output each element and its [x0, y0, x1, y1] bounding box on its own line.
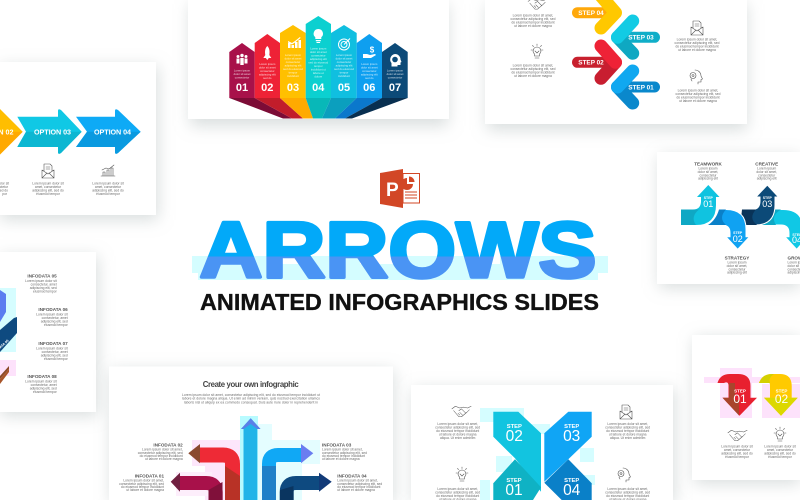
column 01: Lorem ipsum	[234, 68, 251, 72]
arrow: option 04: OPTION 04	[94, 127, 131, 136]
text: upper right block: ut labore et dolore magna	[609, 432, 647, 436]
icon: bulb	[774, 427, 786, 441]
column 02: dolor sit amet	[259, 66, 276, 70]
text: infodata 04: ut labore et dolore magna	[337, 488, 375, 492]
text: creative: Lorem ipsum	[757, 166, 776, 170]
text: infodata 02: consectetur adipiscing elit, sed	[138, 451, 183, 455]
panel: infodata list	[0, 252, 98, 416]
text: infodata 07: adipiscing elit, sed	[41, 354, 68, 358]
text: lower right block	[605, 487, 650, 500]
text: option 04 description: adipiscing elit, sed do	[92, 188, 124, 192]
column 05	[331, 25, 357, 98]
arrow: step 01	[718, 374, 757, 416]
column 04: incididunt ut	[311, 68, 326, 72]
text: infodata 05	[25, 274, 58, 294]
text: upper left block: Lorem ipsum dolor sit amet,	[437, 422, 478, 426]
text: creative	[755, 162, 778, 180]
text: infodata 01	[119, 474, 164, 492]
arrow: infodata 02	[188, 444, 240, 500]
shape: step 03: STEP	[564, 424, 579, 430]
column 04: tempor	[314, 64, 323, 68]
text: creative: adipiscing elit	[757, 176, 777, 180]
text: infodata 03: INFODATA 03	[322, 442, 352, 448]
arrow: step 01: 01	[703, 199, 713, 209]
text: infodata 04: Lorem ipsum dolor sit amet,	[337, 478, 378, 482]
text: infodata 03	[322, 442, 367, 461]
text: upper left block: consectetur adipiscing elit, sed	[435, 426, 480, 430]
text: strategy: adipiscing elit	[727, 270, 747, 274]
column 04: dolore	[314, 74, 323, 78]
text: teamwork: Lorem ipsum	[698, 166, 718, 170]
column 05: tempor	[340, 70, 348, 74]
text: lower left block: consectetur adipiscing elit, sed	[511, 67, 556, 71]
text: infodata 02	[138, 442, 183, 461]
icon: handshake	[528, 0, 547, 9]
arrow: step 01	[618, 71, 654, 103]
column 07	[382, 43, 408, 98]
arrow: step 04: STEP 04	[578, 10, 604, 17]
arrow: step 03	[618, 21, 654, 53]
shape: step 02: STEP	[507, 424, 522, 430]
text: step 02 description: Lorem ipsum dolor sit	[764, 444, 796, 448]
text: upper left block	[435, 422, 480, 440]
icon: bar chart	[288, 37, 301, 48]
column 01: 01	[236, 82, 248, 94]
shape: step 01: 01	[505, 482, 523, 499]
arrow: infodata 01	[171, 473, 222, 500]
column 07: consectetur	[388, 76, 402, 80]
text: upper left block: do eiusmod tempor incididunt	[436, 429, 479, 433]
icon: handshake	[728, 430, 747, 441]
arrow: infodata 04	[280, 473, 332, 500]
text: top left block	[511, 14, 556, 28]
column 01: dolor sit amet	[234, 72, 251, 76]
arrow: step 01: STEP 01	[628, 84, 654, 91]
column 04: dolor sit amet	[310, 50, 327, 54]
column 01	[229, 43, 255, 98]
column 02: 02	[261, 82, 273, 94]
text: lower left block: consectetur adipiscing elit, sed	[435, 490, 480, 494]
arrow: step 02: STEP 02	[578, 60, 604, 67]
text: infodata 08	[25, 374, 58, 394]
text: step 01 description: amet, consectetur	[724, 448, 751, 452]
panel: seven column arrows	[188, 0, 449, 126]
text: lower left block: do eiusmod tempor incididunt	[436, 494, 479, 498]
text: top right block: Lorem ipsum dolor sit amet,	[677, 38, 717, 42]
text: option 02 description	[0, 182, 9, 196]
icon: bulb	[456, 467, 468, 481]
text: lower right block	[676, 88, 721, 103]
column 05: incididunt	[338, 74, 350, 78]
text: option 03 description	[32, 182, 64, 196]
text: upper right block: consectetur adipiscing elit, sed	[605, 426, 650, 430]
shape: step 04	[544, 459, 592, 500]
text: strategy: Lorem ipsum	[727, 260, 747, 264]
text: creative: consectetur	[758, 174, 776, 178]
text: upper right block: Lorem ipsum dolor sit amet,	[607, 422, 648, 426]
text: option 04 description: amet, consectetur	[95, 185, 122, 189]
text: lower left block	[435, 487, 480, 500]
column 03: incididunt	[287, 74, 299, 78]
text: step 02 description: adipiscing elit, sed do	[764, 452, 796, 456]
column 04: sed do eiusmod	[308, 60, 329, 64]
arrow: infodata 03	[262, 444, 313, 500]
column 06: dolor sit amet	[361, 66, 378, 70]
icon: envelope	[691, 21, 703, 35]
text: option 03 description: adipiscing elit, sed do	[32, 188, 64, 192]
icon: head with gear	[690, 70, 702, 84]
text: infodata 06: Lorem ipsum dolor sit	[36, 312, 68, 316]
icon: people	[236, 54, 248, 65]
icon: envelope	[620, 405, 632, 419]
text: infodata 03: ut labore et dolore magna	[322, 457, 360, 461]
column 03: Lorem ipsum	[285, 53, 302, 57]
intro text: laboris nisi ut aliquip ex ea commodo consequat. Duis aute irure dolor in reprehenderit in	[184, 400, 318, 404]
shape: step 01: STEP	[506, 478, 522, 484]
text: infodata 08: INFODATA 08	[27, 374, 57, 379]
panel: step chevrons	[485, 0, 747, 130]
panel: option arrows	[0, 62, 158, 220]
text: upper right block: do eiusmod tempor incididunt	[606, 429, 649, 433]
column 06	[357, 34, 382, 98]
column 04: Lorem ipsum	[310, 46, 327, 50]
text: infodata 07: Lorem ipsum dolor sit	[36, 346, 68, 350]
icon: hand with dollar: $	[370, 46, 375, 54]
text: step 02 description: amet, consectetur	[767, 448, 794, 452]
text: top right block: ut labore et dolore magna	[678, 48, 716, 52]
text: upper left block: aliqua. Ut enim adminim	[440, 436, 476, 440]
icon: powerpoint logo: P	[386, 180, 399, 201]
icon: light bulb	[314, 29, 323, 43]
text: infodata 05: consectetur, amet	[31, 282, 57, 286]
arrow: step 02	[759, 374, 798, 416]
column 03: dolor sit amet	[285, 56, 302, 60]
text: upper right block	[605, 422, 650, 440]
text: top right block: do eiusmod tempor incididunt	[675, 44, 719, 48]
arrow: step 02: STEP	[733, 231, 743, 235]
column 05: dolor sit amet	[336, 56, 353, 60]
column 06: consectetur	[362, 69, 377, 73]
column 03: 03	[287, 82, 299, 94]
column 05: 05	[338, 82, 350, 94]
arrow: step 02	[578, 46, 616, 78]
text: infodata 04: consectetur adipiscing elit, sed	[337, 482, 382, 486]
text: infodata 01: INFODATA 01	[135, 474, 164, 478]
icon: envelope	[42, 164, 54, 178]
column 05: consectetur	[337, 60, 351, 64]
text: infodata 02: Lorem ipsum dolor sit amet,	[142, 448, 183, 452]
column 05: Lorem ipsum	[336, 53, 353, 57]
intro text: labore et dolore magna aliqua. Ut enim ad minim veniam, quis nostrud exercitation ullamco	[182, 397, 320, 401]
text: upper right block: aliqua. Ut enim adminim	[610, 436, 646, 440]
text: infodata 08: adipiscing elit, sed	[30, 386, 57, 390]
arrow: step 04	[578, 0, 616, 28]
arrow: option 03	[17, 109, 82, 154]
text: infodata 07: INFODATA 07	[38, 341, 68, 346]
text: lower right block: do eiusmod tempor incididunt	[606, 494, 649, 498]
icon: bulb	[531, 44, 543, 58]
text: strategy: dolor sit amet,	[727, 264, 747, 268]
text: lower right block: consectetur adipiscing elit, sed	[676, 92, 721, 96]
text: strategy: consectetur	[728, 268, 746, 272]
arrow: center up	[241, 418, 260, 500]
column 02: sed do	[263, 76, 272, 80]
arrow fragments	[0, 290, 17, 384]
text: lower left block: Lorem ipsum dolor sit amet,	[437, 487, 478, 491]
column 04: adipiscing elit	[310, 57, 327, 61]
text: infodata 01: do eiusmod tempor incididunt	[121, 485, 164, 489]
column 04	[306, 16, 331, 98]
text: infodata 01: consectetur adipiscing elit, sed	[119, 482, 164, 486]
shape: step 01	[493, 459, 541, 500]
text: lower left block: ut labore et dolore magna	[514, 74, 552, 78]
text: infodata 06: adipiscing elit, sed	[41, 320, 68, 324]
shape: step 02	[493, 412, 541, 492]
text: step 02 description	[764, 444, 796, 459]
text: infodata 02: ut labore et dolore magna	[145, 457, 183, 461]
shape: step 04: STEP	[564, 478, 579, 484]
icon: handshake	[452, 406, 471, 417]
text: option 03 description: Lorem ipsum dolor sit	[32, 182, 64, 186]
text: infodata 08: eiusmod tempor	[33, 390, 58, 394]
column 06: Lorem ipsum	[361, 62, 378, 66]
text: infodata 05: eiusmod tempor	[33, 290, 58, 294]
column 01: consectetur	[235, 76, 249, 80]
text: infodata 01: Lorem ipsum dolor sit amet,	[123, 478, 164, 482]
text: teamwork: consectetur	[699, 174, 717, 178]
title: arrows: ARROWS	[200, 205, 596, 294]
text: step 02 description: eiusmod tempor	[768, 455, 793, 459]
text: infodata 02: INFODATA 02	[153, 442, 183, 448]
text: infodata 08: Lorem ipsum dolor sit	[25, 380, 57, 384]
text: infodata 04: INFODATA 04	[337, 474, 367, 478]
column 04: consectetur	[311, 54, 326, 58]
text: creative: CREATIVE	[755, 162, 778, 166]
text: step 01 description: eiusmod tempor	[725, 455, 750, 459]
pixelated colour artefacts	[704, 368, 800, 418]
column 02: Lorem ipsum	[259, 62, 276, 66]
arrow: step 03: STEP	[763, 196, 773, 200]
text: teamwork: dolor sit amet,	[698, 170, 718, 174]
text: lower right block: ut labore et dolore magna	[679, 99, 717, 103]
column 02: consectetur	[260, 69, 275, 73]
text: lower right block: Lorem ipsum dolor sit amet,	[607, 487, 648, 491]
text: infodata 07: consectetur, amet	[42, 350, 68, 354]
text: creative: dolor sit amet,	[756, 170, 777, 174]
text: step 01 description: Lorem ipsum dolor sit	[721, 444, 753, 448]
text: infodata 06: INFODATA 06	[38, 307, 68, 312]
panel: create your own infographic	[109, 366, 394, 500]
text: infodata 04: do eiusmod tempor incididunt	[337, 485, 380, 489]
text: option 04 description: Lorem ipsum dolor sit	[92, 182, 124, 186]
text: top right block	[675, 38, 720, 52]
column 04: 04	[312, 82, 325, 94]
column 03: sed do eiusmod	[283, 67, 303, 71]
column 07: Lorem ipsum	[387, 68, 404, 72]
text: top left block: do eiusmod tempor incididunt	[511, 20, 555, 24]
text: option 02 description: por	[2, 192, 8, 196]
icon: chart	[101, 165, 115, 176]
panel: down arrows	[692, 335, 800, 484]
text: teamwork: TEAMWORK	[694, 162, 722, 166]
text: teamwork: adipiscing elit	[698, 176, 718, 180]
text: lower left block	[511, 64, 556, 78]
text: infodata 03: consectetur adipiscing elit, sed	[322, 451, 367, 455]
text: top left block: Lorem ipsum dolor sit amet,	[513, 14, 553, 18]
column 05: adipiscing elit	[336, 64, 353, 68]
arrow: step 03: STEP 03	[628, 35, 654, 42]
column 06: adipiscing elit	[361, 72, 378, 76]
title: Create your own infographic	[203, 380, 299, 389]
fan folds under columns	[229, 98, 408, 118]
text: infodata 05: Lorem ipsum dolor sit	[25, 279, 57, 283]
column 03	[280, 25, 306, 98]
text: lower right block: consectetur adipiscing elit, sed	[605, 490, 650, 494]
text: infodata 02: do eiusmod tempor incididunt	[140, 454, 183, 458]
icon: target	[338, 38, 350, 50]
arrow: step 02: 02	[733, 234, 743, 244]
arrow: option 03: OPTION 03	[34, 127, 71, 136]
column 07: 07	[389, 82, 401, 94]
text: growth	[788, 256, 800, 274]
text: option 04 description: eiusmod tempor	[96, 192, 121, 196]
icon: head with gear	[618, 468, 630, 482]
icon: rocket	[263, 46, 271, 60]
column 07: dolor sit amet	[387, 72, 404, 76]
arrow: step 01	[681, 185, 720, 225]
text: infodata 06: eiusmod tempor	[44, 323, 69, 327]
intro text: Lorem ipsum dolor sit amet, consectetur adipiscing elit, sed do eiusmod tempor incididunt ut	[182, 393, 320, 397]
text: step 01 description: adipiscing elit, sed do	[721, 452, 753, 456]
text: infodata 07: eiusmod tempor	[44, 357, 69, 361]
arrow: step 03: 03	[762, 199, 772, 209]
text: teamwork	[694, 162, 722, 180]
text: option 03 description: eiusmod tempor	[36, 192, 61, 196]
text: infodata 06	[36, 307, 69, 327]
text: infodata 07	[36, 341, 69, 361]
text: strategy: STRATEGY	[725, 256, 749, 260]
arrow: option 02	[0, 109, 23, 154]
text: strategy	[725, 256, 749, 274]
icon: powerpoint logo	[380, 169, 420, 208]
column 03: adipiscing elit	[285, 64, 302, 68]
column 04: labore et	[313, 71, 324, 75]
column 02: adipiscing elit	[259, 72, 276, 76]
text: top left block: consectetur adipiscing elit, sed	[511, 17, 556, 21]
text: top right block: consectetur adipiscing elit, sed	[675, 41, 720, 45]
column 06: sed do	[365, 76, 374, 80]
shape: step 03: 03	[563, 428, 580, 445]
shape: step 03	[544, 412, 592, 482]
panel: curved step arrows	[657, 152, 800, 288]
text: infodata 01: ut labore et dolore magna	[126, 488, 164, 492]
intro text	[182, 393, 320, 404]
shape: step 02: 02	[506, 428, 523, 445]
pixelated colour artefacts	[176, 416, 320, 500]
text: lower left block: Lorem ipsum dolor sit amet,	[513, 64, 553, 68]
arrow: step 02	[708, 210, 750, 249]
text: infodata 05: INFODATA 05	[27, 274, 57, 278]
arrow: step 02: 02	[775, 392, 788, 406]
text: infodata 03: Lorem ipsum dolor sit amet,	[322, 448, 363, 452]
text: infodata 06: consectetur, amet	[42, 316, 68, 320]
pixelated colour artefacts	[480, 408, 595, 500]
panel: x shaped steps	[411, 385, 675, 500]
arrow: step 01: STEP	[734, 388, 746, 394]
arrow: step 04	[762, 210, 800, 249]
text: infodata 03: do eiusmod tempor incididunt	[322, 454, 365, 458]
text: infodata 04	[337, 474, 382, 492]
shape: step 04: 04	[563, 482, 581, 499]
icon: head with globe	[390, 54, 402, 66]
arrow: step 01: STEP	[704, 196, 714, 200]
subtitle: ANIMATED INFOGRAPHICS SLIDES	[200, 289, 599, 315]
arrow: step 01: 01	[733, 392, 747, 406]
text: lower right block: do eiusmod tempor incididunt	[676, 96, 720, 100]
text: upper left block: ut labore et dolore magna	[439, 432, 477, 436]
pixelated colour artefacts	[0, 288, 16, 376]
column 05: sed do eiusmod	[334, 67, 354, 71]
text: infodata 05: adipiscing elit, sed	[30, 286, 57, 290]
text: lower right block: Lorem ipsum dolor sit amet,	[678, 88, 718, 92]
text: step 01 description	[721, 444, 753, 459]
arrow: step 02: STEP	[776, 388, 787, 394]
arrow: option 04	[76, 109, 141, 154]
text: infodata 08: consectetur, amet	[31, 383, 57, 387]
text: option 04 description	[92, 182, 124, 196]
column 02	[255, 34, 280, 98]
text: lower left block: do eiusmod tempor incididunt	[511, 70, 555, 74]
column 03: tempor	[289, 70, 297, 74]
arrow: step 03	[735, 185, 778, 225]
column 03: consectetur	[286, 60, 300, 64]
text: top left block: ut labore et dolore magna	[514, 24, 552, 28]
text: option 03 description: amet, consectetur	[35, 185, 62, 189]
column 06: 06	[363, 82, 375, 94]
